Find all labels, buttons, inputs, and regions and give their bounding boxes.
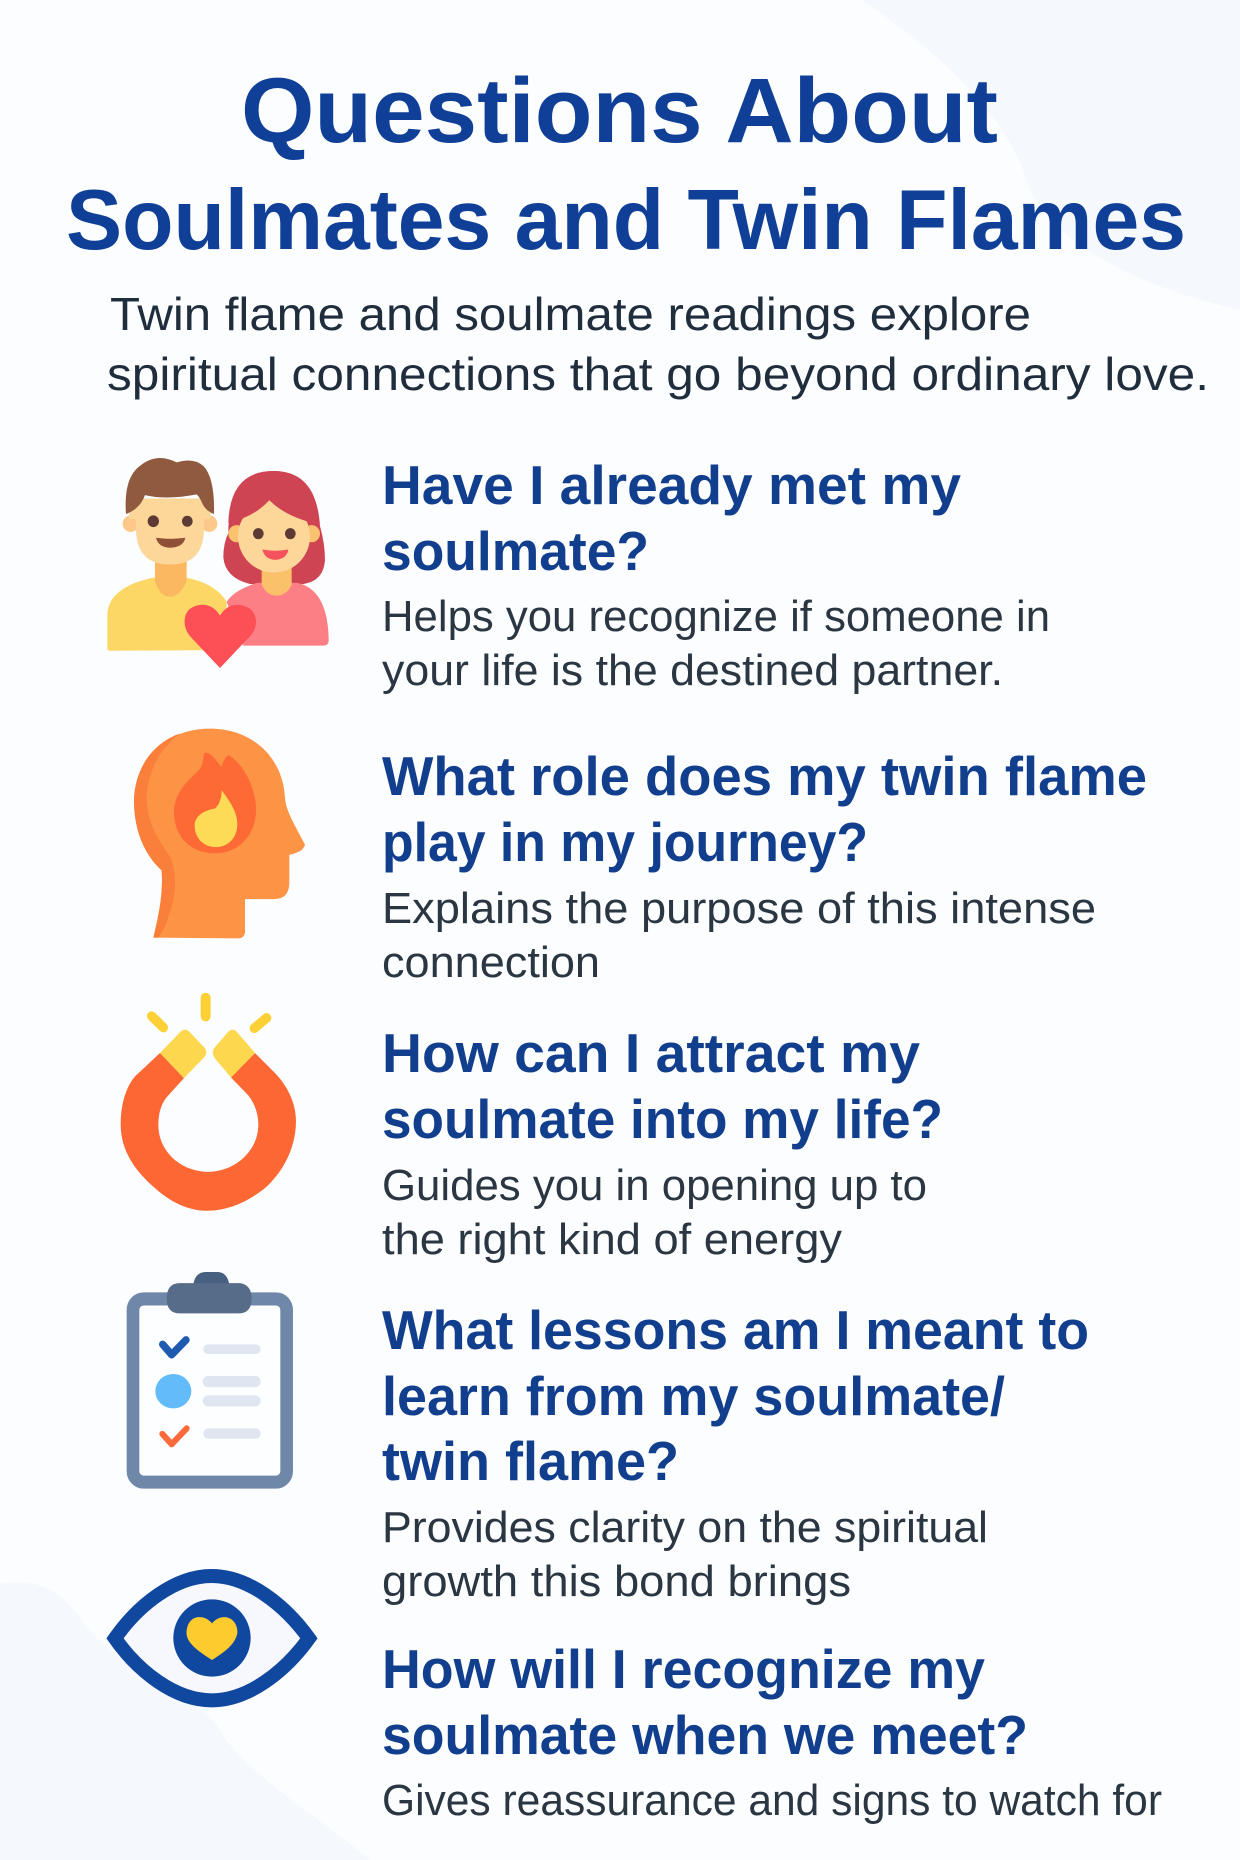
subtitle text	[107, 288, 1209, 400]
heading: question 3: soulmate into my life?	[382, 1088, 943, 1150]
description: question 2: connection	[382, 938, 600, 987]
heading: question 2	[382, 745, 1147, 873]
subtitle text: spiritual connections that go beyond ordinary love.	[107, 348, 1209, 400]
description: question 1: your life is the destined partner.	[382, 646, 1003, 695]
heading: question 4: What lessons am I meant to	[382, 1299, 1089, 1361]
title: Questions About	[241, 60, 998, 162]
description: question 1	[382, 592, 1050, 695]
description: question 1: Helps you recognize if someone in	[382, 592, 1050, 641]
panel: question 1	[107, 454, 1050, 695]
subtitle text: Twin flame and soulmate readings explore	[110, 288, 1031, 340]
description: question 5: Gives reassurance and signs to watch for	[382, 1776, 1162, 1825]
heading: question 2: What role does my twin flame	[382, 745, 1147, 807]
heading: question 3	[382, 1022, 943, 1150]
icon: clipboard checklist	[133, 1272, 287, 1482]
icon: head with flame	[134, 729, 305, 938]
description: question 4: growth this bond brings	[382, 1557, 851, 1606]
description: question 2	[382, 884, 1096, 987]
title: Soulmates and Twin Flames	[66, 173, 1186, 268]
icon: couple with heart	[107, 458, 329, 668]
icon: magnet	[121, 998, 296, 1211]
heading: question 2: play in my journey?	[382, 811, 868, 873]
heading: question 5: soulmate when we meet?	[382, 1704, 1028, 1766]
description: question 3: the right kind of energy	[382, 1215, 842, 1264]
panel: question 4	[133, 1272, 1089, 1606]
description: question 3	[382, 1161, 927, 1264]
description: question 2: Explains the purpose of this intense	[382, 884, 1096, 933]
heading: question 5	[382, 1638, 1028, 1766]
heading: question 4: twin flame?	[382, 1430, 679, 1492]
heading: question 4	[382, 1299, 1089, 1492]
panel: question 3	[121, 998, 943, 1264]
heading: question 3: How can I attract my	[382, 1022, 920, 1084]
description: question 4	[382, 1503, 988, 1606]
heading: question 5: How will I recognize my	[382, 1638, 985, 1700]
heading: question 1: soulmate?	[382, 520, 649, 582]
description: question 4: Provides clarity on the spiritual	[382, 1503, 988, 1552]
heading: question 4: learn from my soulmate/	[382, 1365, 1005, 1427]
description: question 3: Guides you in opening up to	[382, 1161, 927, 1210]
icon: eye with heart	[115, 1576, 309, 1700]
title	[66, 60, 1186, 268]
panel: question 2	[134, 729, 1147, 987]
panel: question 5	[115, 1576, 1162, 1825]
heading: question 1	[382, 454, 961, 582]
heading: question 1: Have I already met my	[382, 454, 961, 516]
